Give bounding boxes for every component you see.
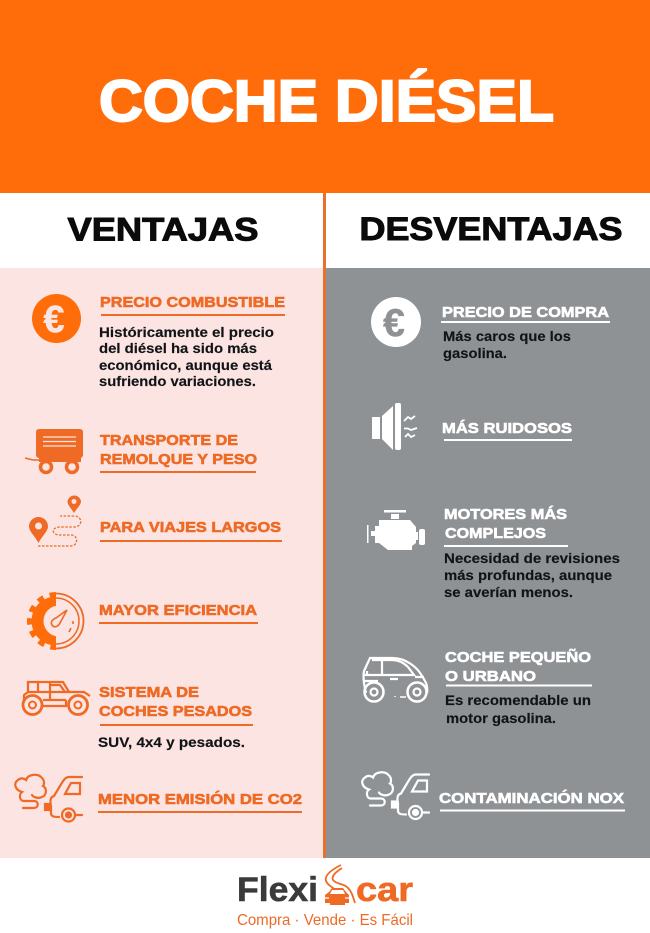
item: más ruidosos: MÁS RUIDOSOS xyxy=(442,420,572,437)
tagline: Compra · Vende · Es Fácil xyxy=(237,912,413,929)
icon: euro orange: € xyxy=(43,299,65,341)
title: COCHE DIÉSEL xyxy=(99,69,554,134)
title banner xyxy=(0,0,650,193)
icon: 4x4 xyxy=(23,682,90,714)
logo: flexicar: car xyxy=(356,871,413,909)
item: coche pequeño o urbano: O URBANO xyxy=(445,668,536,685)
item: precio combustible: del diésel ha sido más xyxy=(99,341,257,356)
item: precio de compra xyxy=(441,304,610,361)
item: coche pequeño o urbano: Es recomendable un xyxy=(445,693,591,708)
item: transporte de remolque y peso xyxy=(100,432,257,473)
item: coche pequeño o urbano xyxy=(445,648,592,726)
item: precio de compra: PRECIO DE COMPRA xyxy=(442,304,609,321)
item: transporte de remolque y peso: TRANSPORTE DE xyxy=(100,432,238,449)
item: precio combustible: Históricamente el precio xyxy=(99,325,274,340)
icon: route pins xyxy=(29,496,81,546)
logo: flexicar xyxy=(237,865,413,929)
item: precio de compra: Más caros que los xyxy=(443,329,571,344)
item: motores más complejos: MOTORES MÁS xyxy=(444,506,567,523)
item: precio combustible: económico, aunque está xyxy=(99,358,273,373)
item: para viajes largos: PARA VIAJES LARGOS xyxy=(100,519,281,536)
item: motores más complejos: se averían menos. xyxy=(444,585,573,600)
icon: emissions truck xyxy=(15,775,82,822)
heading: desventajas: DESVENTAJAS xyxy=(360,211,622,247)
item: menor emisión de co2: MENOR EMISIÓN DE CO2 xyxy=(98,790,302,808)
panel: desventajas xyxy=(326,211,650,858)
item: precio combustible: sufriendo variaciones. xyxy=(99,374,256,389)
item: motores más complejos: COMPLEJOS xyxy=(445,525,546,542)
item: motores más complejos: más profundas, aunque xyxy=(444,568,613,583)
icon: euro white: € xyxy=(383,302,405,345)
item: contaminación nox: CONTAMINACIÓN NOX xyxy=(439,789,624,807)
item: sistema de coches pesados: SUV, 4x4 y pesados. xyxy=(98,735,245,750)
icon: euro white xyxy=(371,297,421,347)
item: motores más complejos xyxy=(444,506,620,600)
icon: small car xyxy=(364,658,427,702)
divider xyxy=(323,193,326,858)
item: sistema de coches pesados: SISTEMA DE xyxy=(99,684,199,701)
icon: gear gauge xyxy=(30,594,84,648)
panel: ventajas xyxy=(0,212,324,858)
item: precio de compra: gasolina. xyxy=(443,346,507,361)
item: mayor eficiencia: MAYOR EFICIENCIA xyxy=(99,602,257,619)
icon: engine xyxy=(367,510,425,550)
icon: road and car xyxy=(325,865,355,905)
item: precio combustible: PRECIO COMBUSTIBLE xyxy=(100,294,285,311)
item: coche pequeño o urbano: COCHE PEQUEÑO xyxy=(445,648,591,666)
icon: loud speaker xyxy=(372,403,417,450)
icon: emissions truck white xyxy=(362,772,429,819)
item: precio combustible xyxy=(99,294,285,389)
logo: flexicar: Flexi xyxy=(237,871,318,909)
item: sistema de coches pesados xyxy=(98,684,253,750)
item: motores más complejos: Necesidad de revisiones xyxy=(444,551,620,566)
item: coche pequeño o urbano: motor gasolina. xyxy=(446,711,556,726)
heading: ventajas: VENTAJAS xyxy=(68,212,258,248)
icon: euro orange xyxy=(32,294,81,343)
icon: trailer xyxy=(25,429,83,472)
item: transporte de remolque y peso: REMOLQUE Y PESO xyxy=(100,451,257,468)
item: sistema de coches pesados: COCHES PESADOS xyxy=(99,703,252,720)
